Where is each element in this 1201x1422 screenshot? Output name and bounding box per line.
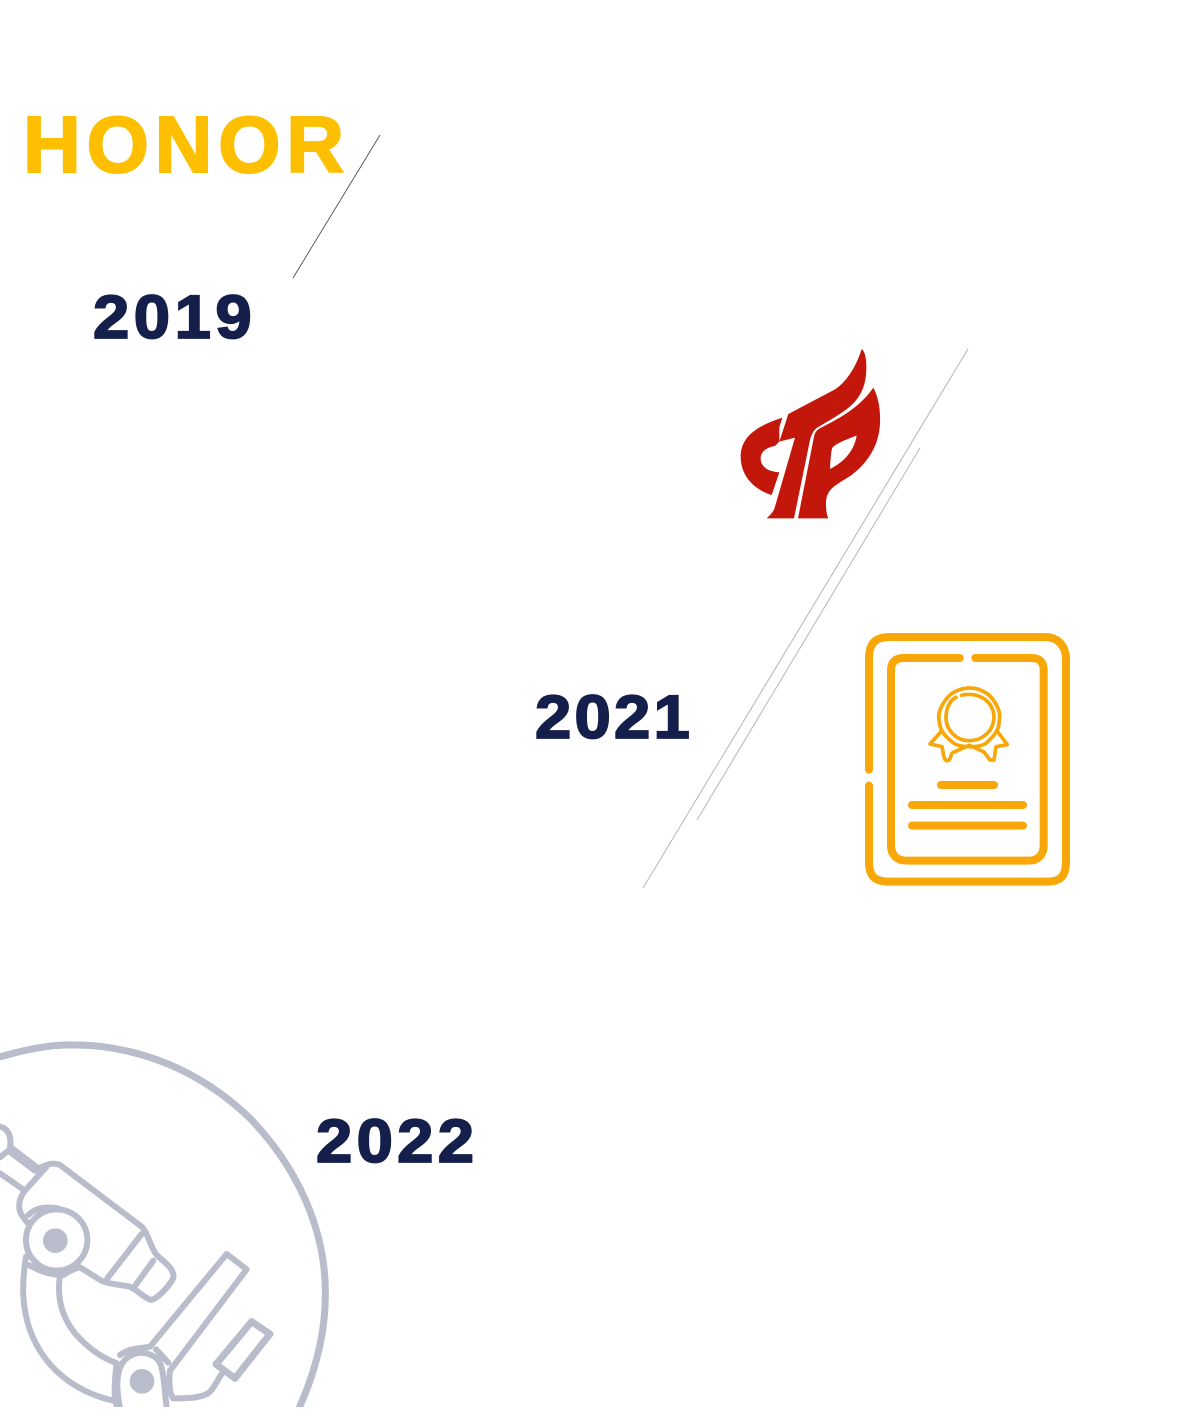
icon: microscope in circle bbox=[0, 1045, 325, 1408]
microscope head ring bbox=[26, 1209, 87, 1271]
microscope tube bbox=[0, 1127, 173, 1300]
microscope base ring bbox=[117, 1353, 167, 1408]
diagonal line: title bbox=[293, 135, 380, 278]
diagonal line: long bbox=[643, 349, 968, 888]
microscope arm bbox=[23, 1257, 117, 1408]
icon: red flame logo bbox=[741, 349, 880, 518]
outer circle arc bbox=[0, 1045, 325, 1408]
year: 2019: 2019 bbox=[93, 284, 256, 352]
year: 2021: 2021 bbox=[535, 684, 693, 752]
certificate badge bbox=[930, 688, 1007, 761]
title: HONOR bbox=[23, 100, 344, 189]
icon: certificate bbox=[869, 637, 1066, 882]
year: 2022: 2022 bbox=[316, 1108, 478, 1176]
microscope stage bbox=[120, 1254, 247, 1371]
diagonal line: short bbox=[697, 448, 920, 820]
